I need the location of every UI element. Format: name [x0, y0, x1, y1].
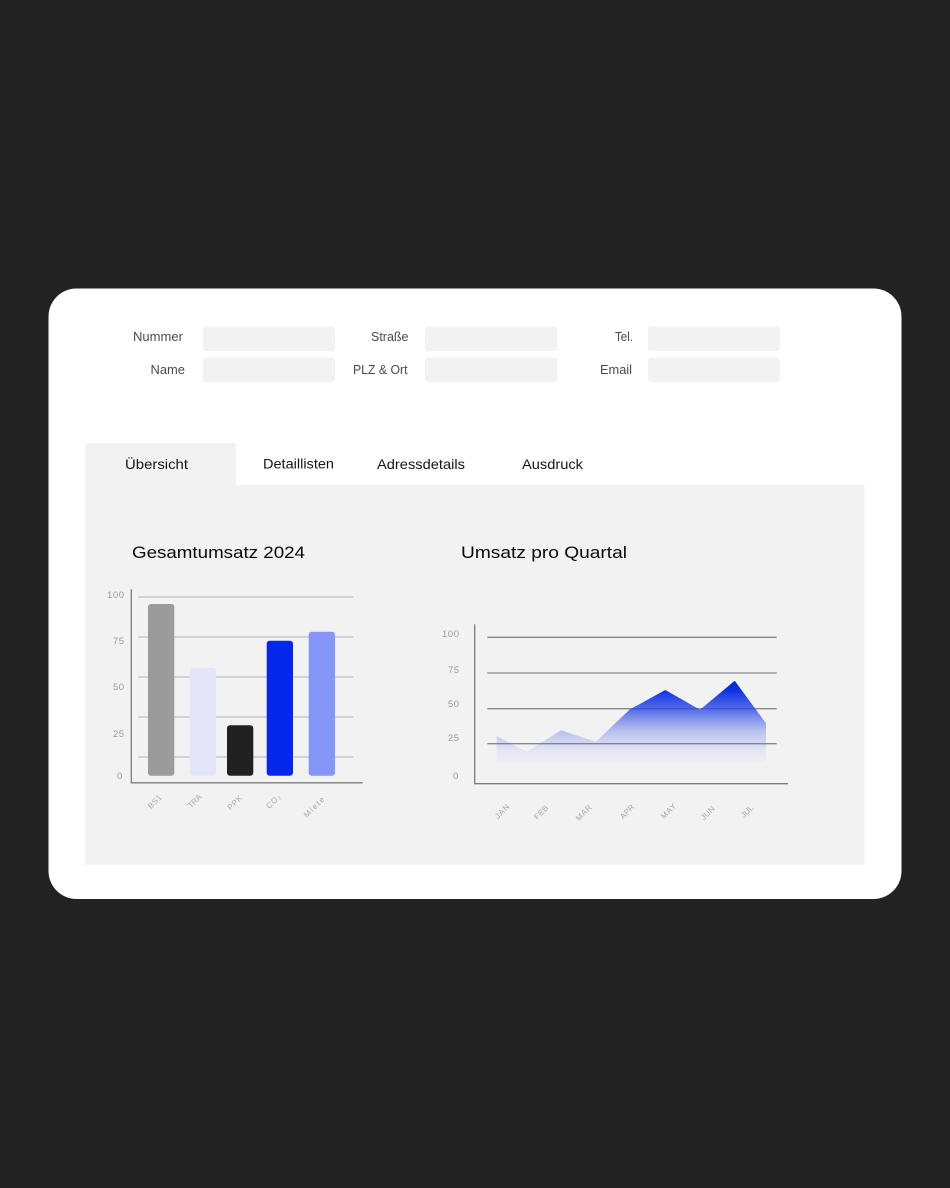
tab: Ausdruck: Ausdruck — [522, 456, 584, 472]
y axis labels: 50 — [448, 699, 459, 710]
tab: Detaillisten: Detaillisten — [263, 456, 334, 472]
area: monthly revenue — [497, 681, 766, 763]
bar chart: Gesamtumsatz 2024 — [107, 589, 363, 820]
field: PLZ & Ort: PLZ & Ort — [353, 363, 408, 377]
y axis labels — [107, 590, 124, 782]
tab: Adressdetails: Adressdetails — [377, 456, 465, 472]
area chart: Umsatz pro Quartal — [442, 624, 788, 823]
bar: BS1 — [148, 604, 174, 776]
x axis labels: BS1 — [146, 793, 164, 811]
x axis labels: TRA — [186, 792, 204, 810]
field: Email: Email — [600, 363, 632, 377]
field: Nummer: Nummer — [133, 330, 183, 344]
x axis labels: APR — [618, 802, 637, 821]
y axis labels: 75 — [113, 636, 124, 647]
x axis labels — [493, 801, 756, 823]
y axis labels: 75 — [448, 665, 459, 676]
x axis labels: CO₂ — [264, 792, 283, 811]
field: Tel. — [615, 326, 780, 351]
bar: CO2 — [267, 641, 293, 776]
panel: overview content — [85, 485, 864, 865]
panel: main card — [48, 288, 902, 899]
y axis labels: 100 — [442, 629, 459, 640]
heading: Umsatz pro Quartal: Umsatz pro Quartal — [461, 544, 627, 562]
y axis labels — [442, 629, 459, 782]
x axis labels: JUN — [699, 804, 717, 822]
field: Tel.: Tel. — [615, 330, 633, 344]
field: Email — [600, 358, 780, 382]
tab: Übersicht (active) — [85, 443, 236, 486]
bar: PPK — [227, 725, 253, 776]
field: Straße: Straße — [371, 330, 409, 344]
y axis labels: 25 — [113, 729, 124, 740]
heading: Gesamtumsatz 2024: Gesamtumsatz 2024 — [132, 544, 305, 562]
x axis labels: MAY — [659, 801, 679, 821]
y axis labels: 0 — [453, 771, 458, 782]
field: Name — [150, 358, 335, 382]
y axis labels: 100 — [107, 590, 124, 601]
tab: Übersicht (active): Übersicht — [125, 455, 188, 472]
field: Name: Name — [150, 363, 185, 377]
x axis labels: MAR — [574, 803, 594, 823]
bar: TRA — [190, 668, 216, 776]
x axis labels: FEB — [532, 804, 550, 822]
y axis labels: 50 — [113, 682, 124, 693]
form: address fields — [133, 326, 780, 382]
x axis labels: JUL — [739, 803, 756, 820]
x axis labels: PPK — [226, 793, 244, 812]
y axis labels: 25 — [448, 733, 459, 744]
field: Straße — [371, 326, 558, 351]
field: PLZ & Ort — [353, 358, 558, 382]
field: Nummer — [133, 326, 335, 351]
x axis labels: JAN — [493, 802, 512, 821]
x axis labels — [146, 792, 327, 820]
bar: Miete — [309, 632, 335, 776]
x axis labels: Miete — [302, 795, 327, 820]
y axis labels: 0 — [117, 771, 122, 782]
